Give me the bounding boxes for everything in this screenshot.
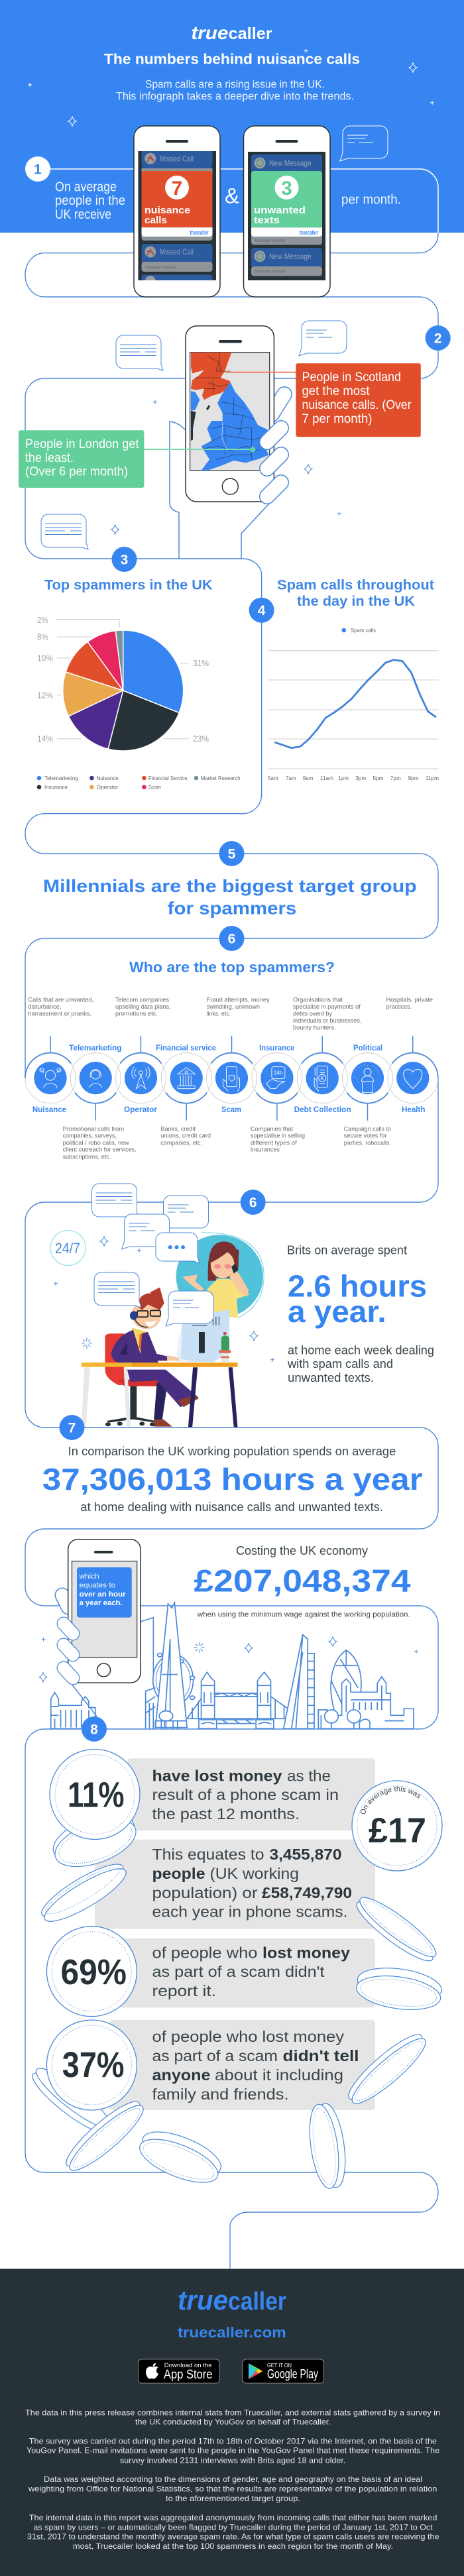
step 1 marker [25,156,50,182]
top descriptions: Telecom companies [115,997,169,1004]
icon: telemarketing [89,1070,101,1088]
top descriptions: Calls that are unwanted, [28,997,93,1004]
callout: London [19,430,256,488]
category names [32,1044,426,1114]
text: equates: £58,749,790 [262,1884,352,1901]
heading: for spammers [168,898,296,918]
chart x axis labels: 1pm [338,775,349,781]
bottom descriptions [63,1125,391,1160]
sparkles [39,1637,418,1682]
phone: economy [68,1540,141,1683]
map of the UK [191,353,268,471]
big stat: 2.6 hours a year [288,1269,427,1329]
card: nuisance calls [142,171,212,237]
speech bubbles [91,1184,208,1263]
text: at home: at home each week dealing [288,1343,434,1357]
methodology text: YouGov Panel. E-mail invitations were sent to the people in the YouGov Panel that met these requirements. The [27,2446,439,2455]
coin: 11%: 11% [68,1775,125,1815]
phone: 7 nuisance calls: Missed Call [160,247,194,256]
badge: App Store: Download on the [164,2362,212,2369]
hand holding phone [170,394,284,559]
sparkles [111,400,341,534]
heading: Millennials are the biggest target group [43,876,417,896]
text: on average [55,180,125,222]
category circles [25,1053,438,1103]
text: didn't tell anyone: didn't tell [282,2047,359,2064]
chart x axis labels: 5am [268,775,278,781]
icon: insurance: 24h [274,1070,283,1076]
sparkles [54,1237,274,1362]
logo: truecaller: caller [229,25,272,43]
man at desk illustration [82,1288,237,1427]
step 6 marker [241,1190,266,1215]
chart x axis labels: 7am [286,775,296,781]
pie legend: Nuisance [97,775,119,781]
chart legend [342,627,376,634]
bottom descriptions: political / robo calls, new [63,1139,129,1147]
text: didn't tell anyone: anyone [152,2066,211,2084]
bottom descriptions: Banks, credit [160,1125,196,1133]
pie legend: Operator [97,784,119,791]
badge: Google Play: Google Play [267,2367,318,2382]
step 6 marker [219,926,244,951]
pie legend: Market Research [201,775,241,781]
logo: truecaller: caller [228,2288,286,2316]
text: on average: UK receive [55,207,111,222]
icon: financial service [178,1068,195,1089]
coin: £17: £17 [369,1811,426,1850]
top descriptions: disturbance, [28,1003,61,1011]
line chart [268,651,439,769]
top descriptions: Fraud attempts, money [207,997,270,1004]
hand holding phone [62,1595,153,1716]
phone: 3 unwanted texts: New Message [269,158,312,168]
step 1 marker: 1 [34,162,42,178]
text: have lost money: the past 12 months. [152,1805,300,1822]
icon: political [355,1065,379,1093]
bottom descriptions: different types of [251,1139,297,1147]
chart x axis labels: 9am [303,775,313,781]
subtitle [116,78,354,103]
speech bubbles near man [94,1272,213,1326]
text: per month: per month. [341,193,401,207]
icon: health [404,1069,422,1089]
callout: Scotland: get the most [302,384,370,398]
pie labels: 8% [37,632,48,642]
chart x axis labels: 3pm [355,775,366,781]
panel: map section [19,321,451,572]
pie legend: Insurance [44,784,68,791]
text: didn't tell anyone [152,2028,359,2103]
callout: Scotland: nuisance calls. (Over [302,398,412,412]
text: Brits on average: Brits on average spent [287,1243,407,1257]
heading [277,577,434,609]
phone: 7 nuisance calls [134,126,220,297]
coin: £17 [351,1780,443,1872]
top descriptions [28,997,433,1032]
header connector segment in white [50,169,438,233]
logo: truecaller [191,23,272,43]
panel: header [25,23,434,222]
methodology text [25,2408,440,2551]
phone: 3 unwanted texts [244,126,330,297]
phone: 3 unwanted texts: Unknown Number [255,239,286,243]
decorative sparkles [28,49,434,126]
phone: 3 unwanted texts: New Message [269,252,312,261]
text: equates [152,1846,352,1921]
chart x axis labels: 7pm [390,775,401,781]
bottom descriptions: unions, credit card [160,1133,211,1140]
panel: population total [42,1415,423,1514]
badge: App Store [138,2359,219,2383]
icon: nuisance [40,1068,61,1088]
card: over an hour: a year each. [80,1599,123,1607]
methodology text: the UK conducted by YouGov on behalf of Truecaller. [135,2418,331,2427]
text: equates: 3,455,870 [269,1846,342,1863]
step 3 marker: 3 [121,553,128,567]
coin: 69% [46,1927,137,2017]
step 7 marker [60,1415,85,1440]
title: The numbers behind nuisance calls [104,51,360,68]
top descriptions: promotions etc. [115,1011,158,1018]
logo: truecaller [178,2284,286,2316]
top descriptions: bounty hunters. [293,1025,336,1032]
chart x axis labels: 5pm [373,775,383,781]
text: have lost money: as the [287,1767,331,1784]
icon: insurance [266,1067,285,1089]
top descriptions: links, etc. [207,1011,231,1018]
methodology text: to the aforementioned target group. [166,2494,300,2503]
category names: Scam [221,1106,241,1114]
big stat: hours a year: 37,306,013 hours a year [42,1462,423,1496]
text: have lost money: result of a phone scam in [152,1786,339,1803]
step 8 marker [82,1716,107,1742]
bottom descriptions: Campaign calls to [344,1125,391,1133]
category names: Operator [124,1106,158,1114]
methodology text: weighting from Office for National Statistics, so that the results are representative of the population in relation [28,2484,437,2493]
panel: who are the top spammers [25,926,438,1160]
card: nuisance calls: 7 [172,178,182,199]
text: didn't tell anyone: about it including [215,2066,343,2084]
grey text boxes [95,1758,375,2110]
icon: debt collection: € [321,1076,324,1082]
icon: typing dots [168,1245,185,1249]
panel: spam calls line chart [268,577,439,781]
category names: Telemarketing [69,1044,122,1052]
text: didn't report: report it. [152,1982,216,1999]
phone: 3 unwanted texts: Unknown Number [255,270,286,274]
pie legend: Financial Service [148,775,188,781]
methodology text: Data was weighted according to the dimensions of gender, age and geography on the basis of an ideal [44,2475,422,2484]
step 3 marker [111,547,137,572]
text: didn't report: lost money [262,1944,350,1962]
phone with UK map [186,326,274,502]
bottom descriptions: sopecialise in selling [251,1133,305,1140]
pie legend: Scam [148,784,161,791]
top descriptions: Organisations that [293,997,343,1004]
phone: 7 nuisance calls: Missed Call [160,154,194,163]
card: unwanted texts: unwanted [254,205,306,216]
card: unwanted texts: truecaller [300,229,318,236]
category names: Insurance [259,1044,295,1052]
text: on average: people in the [55,194,125,208]
text: didn't report: as part of a scam didn't [152,1963,325,1980]
ampersand: & [225,184,239,208]
fingers [64,1624,73,1678]
top descriptions: upselling data plans, [115,1003,171,1011]
panel: blue header background [0,0,464,233]
badge: Google Play: GET IT ON [267,2363,292,2369]
chart x axis labels: 11am [320,775,333,781]
chart x axis labels: 9pm [408,775,419,781]
card: nuisance calls: truecaller [190,229,209,236]
step 6 marker: 6 [249,1196,257,1210]
badge: Google Play [243,2359,323,2383]
pie labels [37,615,209,744]
text: at home: unwanted texts. [288,1371,374,1384]
big stat: 2.6 hours a year: a year. [288,1294,386,1329]
connector line running through the whole infographic [25,225,438,2268]
woman on phone illustration [176,1233,264,1318]
category names: Political [353,1044,382,1052]
icon: debt collection [314,1066,327,1092]
step 8 marker: 8 [90,1722,98,1738]
text: equates: population) or [152,1884,258,1901]
step 5 marker: 5 [228,847,236,862]
bottom descriptions: insurances [251,1147,280,1154]
pie labels: 23% [193,734,209,744]
panel: millennials [43,841,417,918]
coin: 37%: 37% [62,2045,125,2085]
text: equates: people [152,1865,205,1882]
text: have lost money: have lost money [152,1767,282,1784]
top descriptions: Hospitals, private [386,997,433,1004]
card: over an hour: equates to [80,1582,115,1590]
heading: Top spammers in the UK [44,577,212,592]
panel: 2.6 hours a year [50,1184,434,1427]
pie labels: 12% [37,691,53,700]
pie labels: 10% [37,653,53,663]
text: didn't tell anyone: family and friends. [152,2086,289,2103]
falling coins [27,1805,444,2191]
bottom descriptions: subscriptions, etc. [63,1153,111,1160]
top descriptions: swindling, unknown [207,1003,260,1011]
methodology text: The internal data in this report was aggregated anonymously from incoming calls that either has been marked [29,2513,437,2522]
methodology text: The data in this press release combines internal stats from Truecaller, and external stats gathered by a survey in [25,2408,440,2417]
badge: App Store: App Store [164,2368,212,2382]
pie legend: Telemarketing [44,775,78,781]
text: comparison: In comparison the UK working population spends on average [68,1445,396,1458]
coin: 37% [46,2020,137,2110]
panel: top spammers pie chart [37,577,241,791]
top descriptions: specialise in payments of [293,1003,361,1011]
heading: Who are the top spammers? [129,959,335,976]
text: didn't report: of people who [152,1944,257,1962]
methodology text: most, Truecaller looked at the top 100 spammers in each region for the month of May. [73,2542,393,2551]
big stat: 2.6 hours a year: 2.6 hours [288,1269,427,1304]
pie labels: 31% [193,658,209,668]
callout: Scotland: People in Scotland [302,370,401,384]
text: equates: This equates to [152,1846,264,1863]
callout: London: the least. [25,451,74,465]
icon: scam [223,1067,240,1092]
pie legend [37,775,241,791]
phone: 7 nuisance calls: Unknown Number [145,265,176,270]
icon: 24/7: 24/7 [55,1240,80,1257]
speech bubbles [41,321,347,549]
top descriptions: debts owed by [293,1011,332,1018]
bottom descriptions: companies, etc. [160,1139,202,1147]
pie chart [63,630,184,751]
top descriptions: individuals or businesses, [293,1017,362,1025]
bottom descriptions: parties, robocalls. [344,1139,391,1147]
methodology text: survey involved 2131 interviews with Brits aged 18 and older. [120,2455,345,2465]
step 4 marker [249,598,274,623]
icon: speech bubble [340,126,388,161]
panel: footer [0,2269,464,2576]
chart legend: Spam calls [351,627,376,634]
card: nuisance calls: nuisance [145,205,190,216]
step 4 marker: 4 [258,603,266,618]
website: truecaller.com [178,2324,286,2341]
text: costing: Costing the UK economy [236,1543,369,1557]
bottom descriptions: secure votes for [344,1133,387,1140]
methodology text: as spam by users – or automatically been flagged by Truecaller during the period of January 1st, 2017 to Oct [33,2522,433,2532]
logo: truecaller: true [178,2284,228,2316]
coin: 69%: 69% [61,1952,127,1992]
bottom descriptions: Promotional calls from [63,1125,124,1133]
subtitle: Spam calls are a rising issue in the UK. [145,78,325,90]
icon: 24/7 [50,1230,86,1266]
text: on average: On average [55,180,117,194]
heading: Spam calls throughout [277,577,434,592]
panel: cost to the economy [39,1540,418,1742]
text: didn't report [152,1944,350,1999]
callout: London: (Over 6 per month) [25,465,128,479]
step 2 marker: 2 [434,331,442,346]
text: minimum wage: when using the minimum wage against the working population. [197,1610,410,1618]
panel: lost money stats [32,1748,443,2189]
pie labels: 2% [37,615,48,625]
step 2 marker [426,325,451,351]
heading: the day in the UK [297,594,415,609]
connector ticks [50,1036,413,1121]
bottom descriptions: Companies that [251,1125,293,1133]
category names: Debt Collection [294,1106,351,1114]
icon: operator [132,1067,150,1089]
category names: Financial service [156,1044,216,1052]
big stat: cost: £207,048,374 [194,1563,411,1598]
bottom descriptions: companies, surveys, [63,1133,117,1140]
fingers [267,428,281,496]
chart x axis labels: 11pm [426,775,439,781]
text: equates: each year in phone scams. [152,1903,347,1921]
text: equates: (UK working [209,1865,299,1882]
top descriptions: practices. [386,1003,412,1011]
heading [43,876,417,918]
callout: Scotland: 7 per month) [302,412,373,426]
subtitle: This infograph takes a deeper dive into the trends. [116,91,354,103]
step 5 marker [219,841,244,866]
callout: Scotland [225,363,421,437]
text: have lost money [152,1767,339,1822]
category names: Health [402,1106,426,1114]
step 6 marker: 6 [228,932,235,946]
card: over an hour [77,1567,132,1618]
step 7 marker: 7 [68,1421,76,1435]
chart x axis labels [268,775,439,781]
text: at home: with spam calls and [287,1357,393,1371]
text: at home [287,1343,434,1384]
card: over an hour: over an hour [80,1591,126,1598]
callout: London: People in London get [25,437,139,451]
logo: truecaller: true [191,23,228,43]
text: didn't tell anyone: as part of a scam [152,2047,278,2064]
card: over an hour: which [79,1573,99,1581]
London skyline [51,1602,414,1729]
card: unwanted texts: 3 [281,178,292,199]
card: unwanted texts: texts [254,215,280,226]
card: nuisance calls: calls [145,215,167,226]
methodology text: 31st, 2017 to understand the monthly average spam rate. As for what type of spam calls users are receiving the [27,2532,439,2542]
coin: £17: On average this was [361,1785,420,1815]
category names: Nuisance [32,1106,66,1114]
text: at home dealing: at home dealing with nuisance calls and unwanted texts. [80,1500,383,1514]
pie labels: 14% [37,734,53,744]
card: unwanted texts [251,171,322,237]
text: didn't tell anyone: of people who lost money [152,2028,345,2045]
top descriptions: harrassment or pranks. [28,1011,91,1018]
methodology text: The survey was carried out during the period 17th to 18th of October 2017 via the Internet, on the basis of the [29,2436,437,2445]
bottom descriptions: client outreach for services, [63,1147,137,1154]
coin: 11% [50,1750,140,1840]
